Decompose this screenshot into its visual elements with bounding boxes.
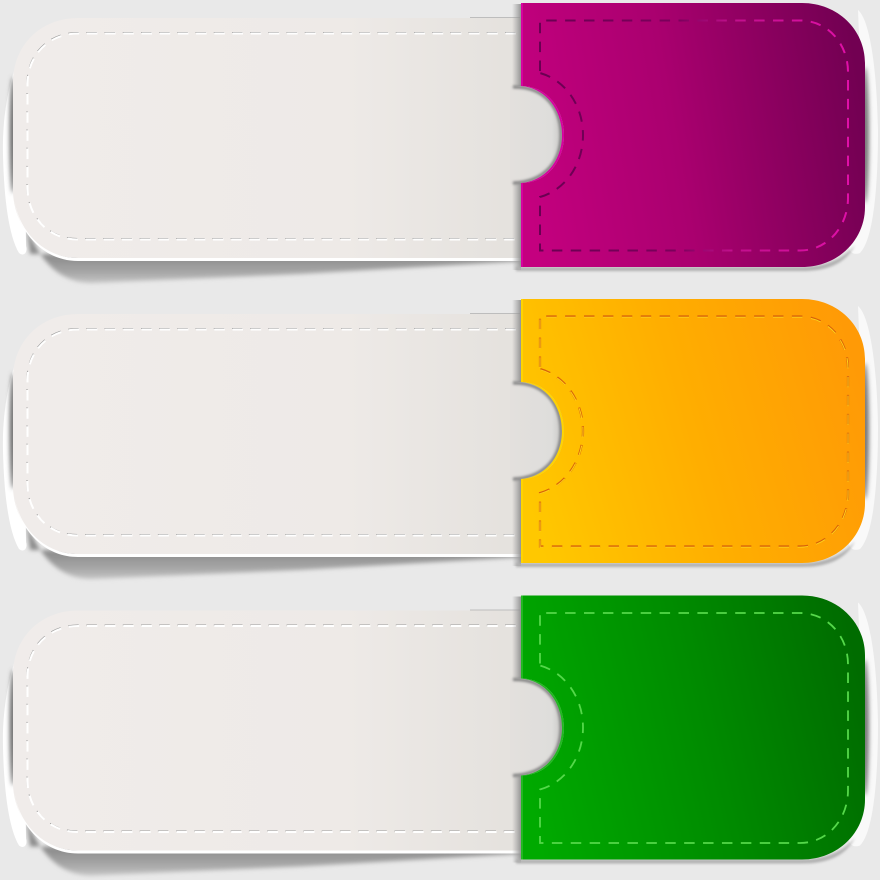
notch cut-out (510, 86, 566, 184)
card bottom highlight (14, 788, 522, 854)
notch shading (513, 383, 561, 479)
tab side shadow (512, 300, 521, 566)
tab side shadow (512, 596, 521, 862)
coloured tab (521, 596, 865, 860)
paper shadow (26, 818, 522, 876)
notch shading (513, 679, 561, 776)
left white highlight (3, 643, 27, 847)
paper shadow (26, 521, 522, 579)
white paper card (13, 610, 522, 850)
card bottom highlight (14, 195, 522, 261)
left edge shadow (10, 373, 16, 489)
right edge shadow (861, 363, 869, 499)
right white highlight (849, 306, 878, 550)
paper stitching (27, 328, 516, 536)
tab bottom shadow (516, 541, 855, 567)
card bottom highlight (14, 491, 522, 557)
tab stitching (540, 20, 848, 250)
tab bottom shadow (516, 838, 855, 864)
coloured tab (521, 3, 865, 267)
notch shading (513, 87, 561, 183)
tab edge light (521, 596, 564, 860)
card edge line (470, 312, 520, 314)
right white highlight (849, 602, 878, 846)
white paper card (13, 18, 522, 258)
card edge line (470, 16, 520, 18)
paper stitching (27, 625, 516, 832)
right edge shadow (861, 660, 869, 796)
left white highlight (3, 346, 27, 550)
tab edge light (521, 3, 564, 267)
right edge shadow (861, 67, 869, 203)
notch cut-out (510, 382, 566, 480)
paper shadow (26, 225, 522, 283)
tab side shadow (512, 4, 521, 270)
card edge line (470, 609, 520, 611)
tab stitching (540, 613, 848, 843)
coloured tab (521, 299, 865, 563)
tab stitching (540, 316, 848, 547)
paper stitching (27, 32, 516, 240)
banner 1: purple (3, 3, 878, 283)
white paper card (13, 314, 522, 554)
banner 3: green (3, 596, 878, 876)
banner 2: yellow (3, 299, 878, 579)
tab bottom shadow (516, 245, 855, 271)
notch cut-out (510, 678, 566, 777)
left edge shadow (10, 77, 16, 193)
right white highlight (849, 10, 878, 254)
left edge shadow (10, 670, 16, 786)
left white highlight (3, 50, 27, 254)
tab edge light (521, 299, 564, 563)
